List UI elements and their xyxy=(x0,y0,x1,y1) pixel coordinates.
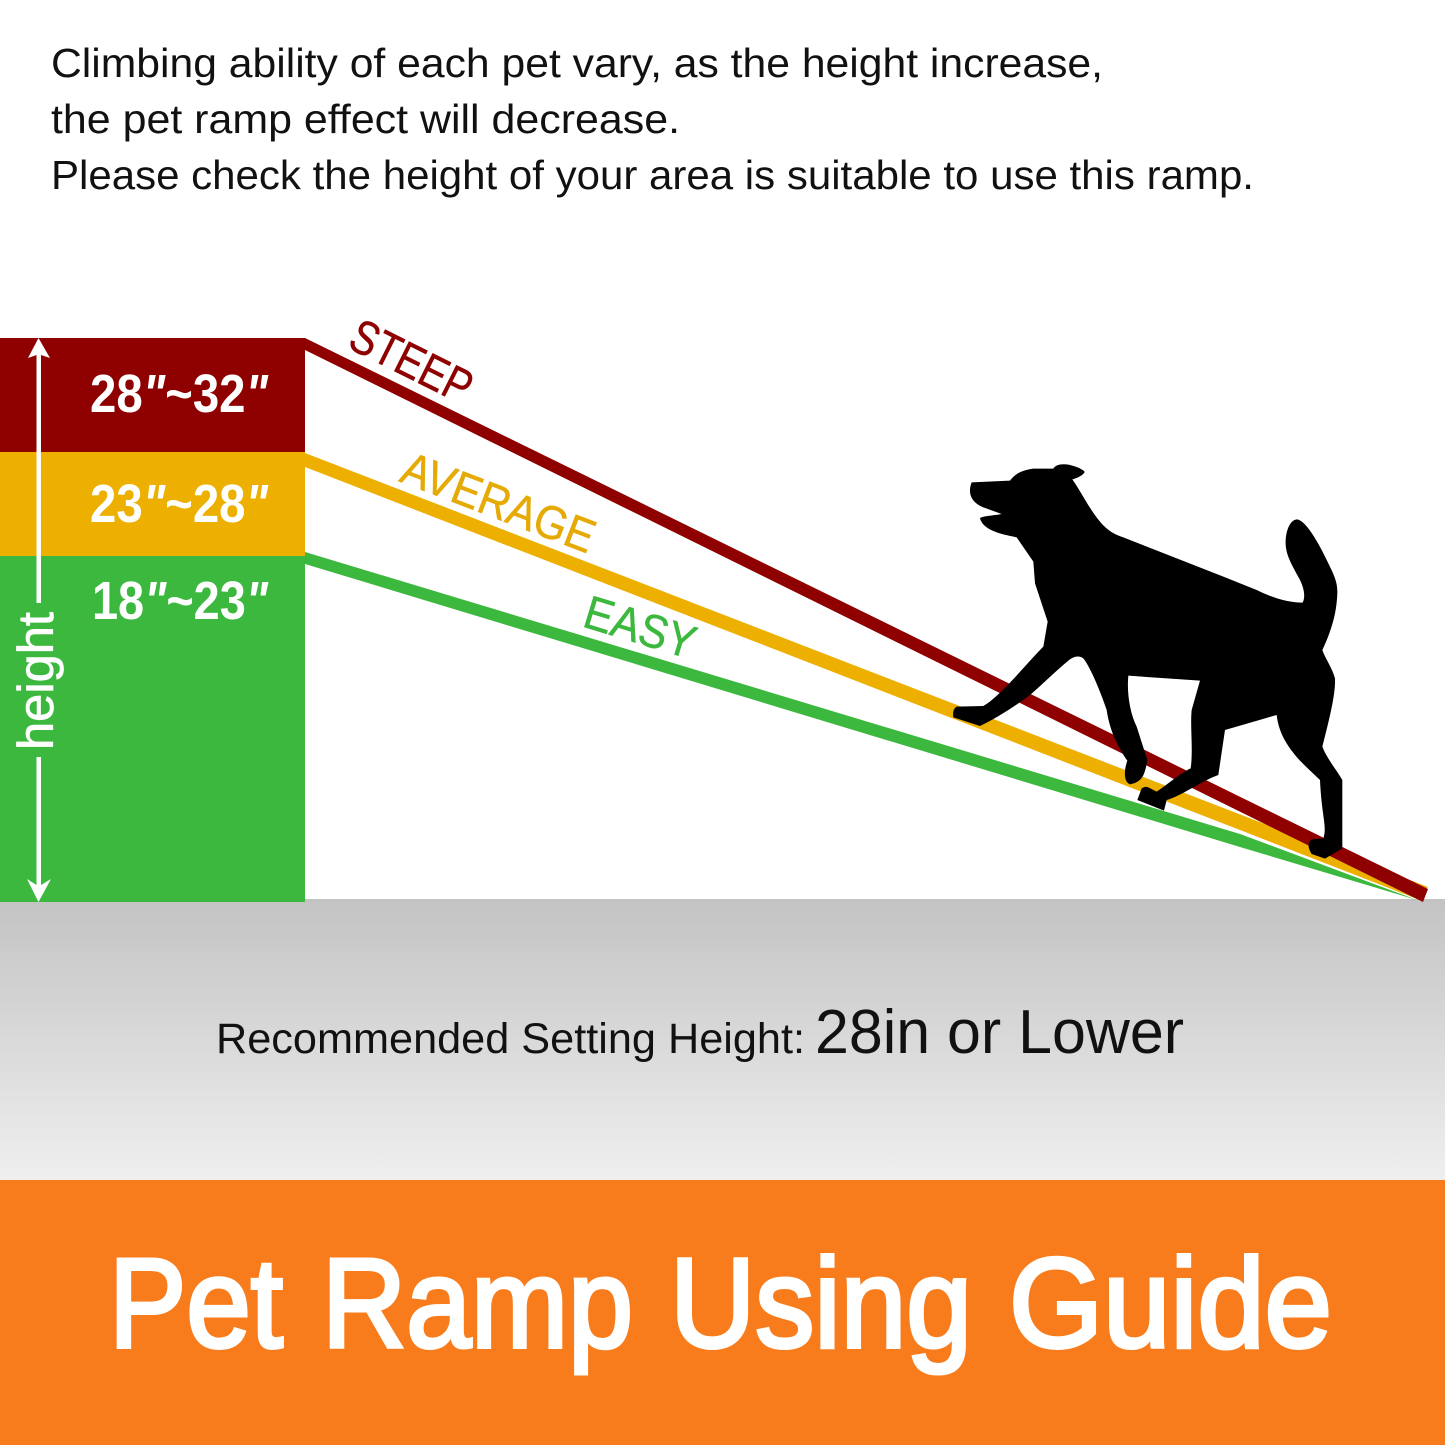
intro text xyxy=(51,40,1254,198)
ramp line: steep xyxy=(305,338,1428,902)
ramp line: easy xyxy=(305,552,1417,900)
ramp line: average xyxy=(305,453,1428,899)
arrow: height down xyxy=(27,757,51,902)
title: Ramp xyxy=(322,1232,633,1374)
band: average height range xyxy=(0,452,305,556)
label: easy: EASY xyxy=(578,585,703,669)
label: 18 to 23 inches: 18"~23" xyxy=(92,571,269,631)
panel: floor xyxy=(0,899,1445,1180)
label: 28 to 32 inches: 28"~32" xyxy=(90,364,269,424)
label: height: height xyxy=(8,612,64,750)
panel: title banner xyxy=(0,1180,1445,1445)
recommended height text: Recommended Setting Height: xyxy=(216,1015,805,1063)
intro text: Please check the height of your area is suitable to use this ramp. xyxy=(51,152,1254,198)
intro text: Climbing ability of each pet vary, as the height increase, xyxy=(51,40,1103,86)
label: average: AVERAGE xyxy=(394,441,603,563)
title: Pet xyxy=(109,1232,283,1374)
intro text: the pet ramp effect will decrease. xyxy=(51,96,680,142)
label: steep: STEEP xyxy=(341,309,481,415)
icon: dog silhouette xyxy=(953,464,1342,859)
band: steep height range xyxy=(0,338,305,452)
recommended height text: 28in or Lower xyxy=(815,998,1184,1067)
label: 23 to 28 inches: 23"~28" xyxy=(90,474,269,534)
band: easy height range xyxy=(0,556,305,902)
title: Guide xyxy=(1009,1232,1332,1374)
title: Using xyxy=(670,1232,972,1374)
arrow: height up xyxy=(28,338,50,603)
panel: height scale xyxy=(0,338,305,902)
